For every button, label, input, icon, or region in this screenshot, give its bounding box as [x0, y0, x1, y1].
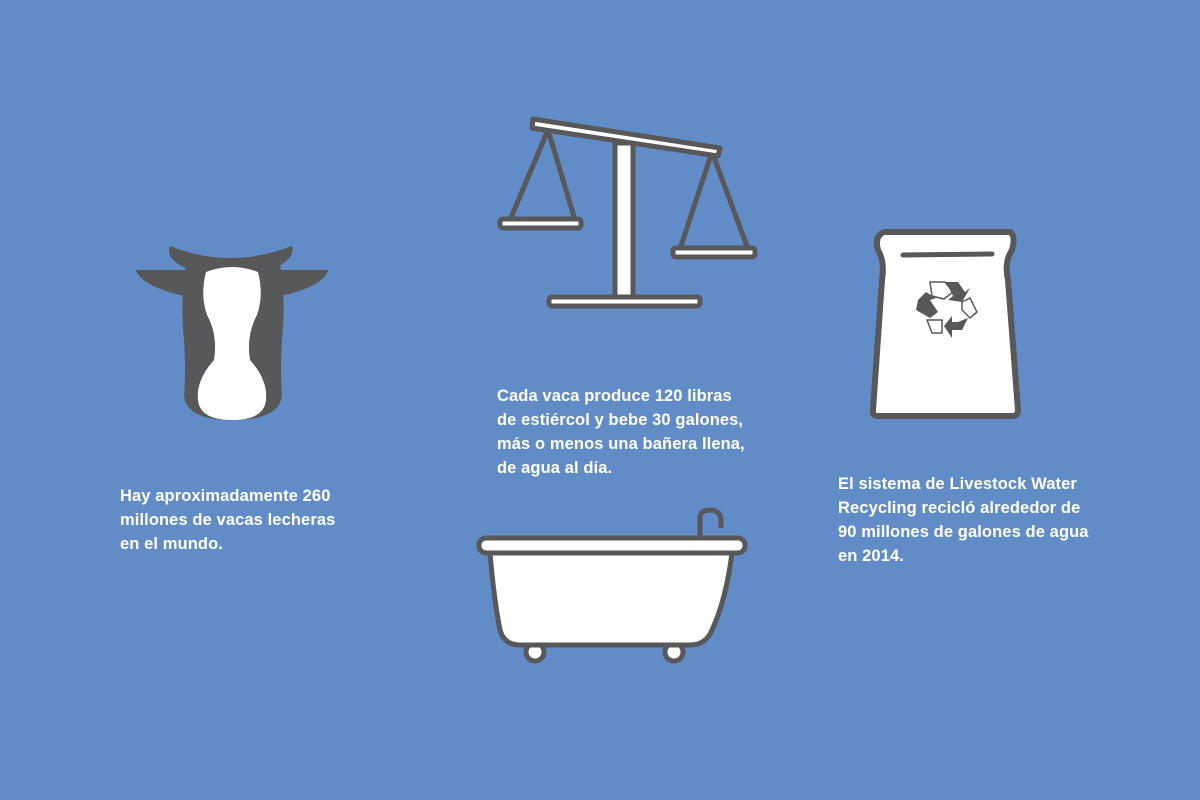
- text: cows worldwide: en el mundo.: [120, 535, 223, 553]
- text: manure and water: Cada vaca produce 120 libras: [497, 387, 732, 405]
- text: recycling: El sistema de Livestock Water: [838, 475, 1077, 493]
- icon: bathtub: [479, 510, 745, 661]
- text: cows worldwide: [120, 487, 335, 553]
- text: manure and water: de estiércol y bebe 30 galones,: [497, 411, 743, 429]
- text: cows worldwide: millones de vacas lecheras: [120, 511, 335, 529]
- icon: cow: [136, 246, 328, 420]
- text: cows worldwide: Hay aproximadamente 260: [120, 487, 330, 505]
- icon: scale: [500, 119, 755, 306]
- icon: recycling bag: [873, 232, 1018, 416]
- text: recycling: en 2014.: [838, 547, 904, 565]
- text: recycling: Recycling recicló alrededor de: [838, 499, 1080, 517]
- text: manure and water: de agua al día.: [497, 459, 612, 477]
- text: recycling: [838, 475, 1089, 565]
- text: manure and water: más o menos una bañera llena,: [497, 435, 745, 453]
- text: manure and water: [497, 387, 745, 477]
- text: recycling: 90 millones de galones de agua: [838, 523, 1089, 541]
